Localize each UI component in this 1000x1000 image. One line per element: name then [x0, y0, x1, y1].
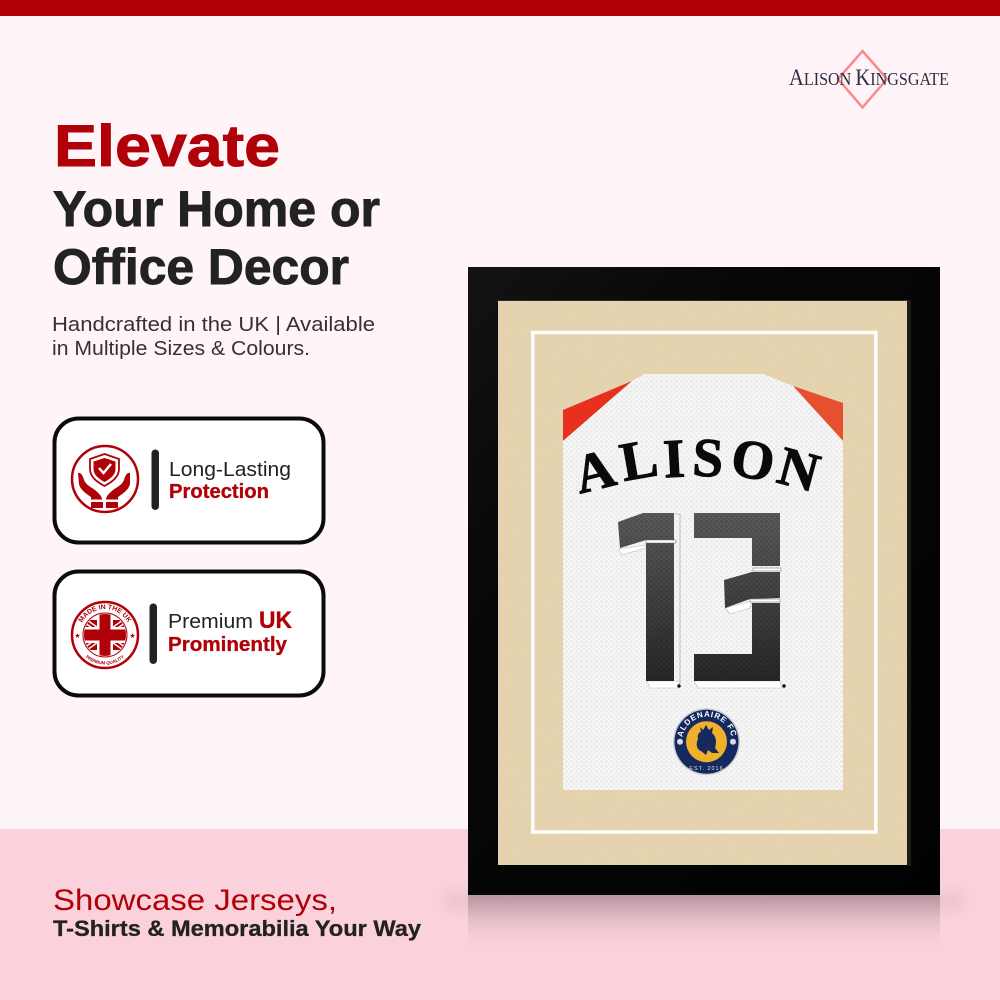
icon: made in the UK stamp: PREMIUM QUALITY	[86, 654, 124, 666]
icon: made in the UK stamp: ★	[74, 632, 81, 640]
mat board	[498, 301, 907, 865]
top bar	[0, 0, 1000, 16]
logo: Alison Kingsgate: ALISON KINGSGATE	[789, 65, 949, 90]
heading: Your Home or	[53, 181, 380, 237]
player name: O	[727, 426, 780, 494]
label: Premium UK Prominently: Premium	[168, 611, 253, 633]
divider	[152, 450, 159, 510]
icon: made in the UK stamp	[70, 600, 140, 670]
player name: N	[772, 435, 826, 504]
player name: A	[568, 437, 621, 505]
panel: long-lasting protection	[54, 418, 324, 542]
label: Premium UK Prominently: UK	[259, 607, 293, 634]
bottom tagline: T-Shirts & Memorabilia Your Way	[53, 916, 422, 941]
label: Long-Lasting Protection: Long-Lasting	[169, 459, 291, 481]
club badge: ALDENAIRE FC	[678, 711, 736, 738]
red sleeve right	[793, 386, 843, 441]
player name: I	[662, 428, 686, 490]
frame	[468, 267, 940, 895]
subheading text: Handcrafted in the UK | Available	[52, 314, 375, 336]
label: Premium UK Prominently: Prominently	[168, 634, 288, 656]
label: Long-Lasting Protection: Protection	[169, 481, 269, 503]
bottom tagline: Showcase Jerseys,	[53, 884, 337, 917]
framed jersey	[468, 267, 940, 895]
divider	[150, 604, 157, 664]
icon: shield in hands	[72, 446, 138, 512]
heading	[53, 114, 380, 295]
icon: made in the UK stamp: MADE IN THE UK	[78, 604, 132, 623]
label: Long-Lasting Protection	[169, 459, 291, 503]
jersey body	[563, 374, 843, 790]
player name: L	[615, 427, 662, 493]
subheading text: in Multiple Sizes & Colours.	[52, 338, 310, 360]
heading: Elevate	[54, 114, 280, 179]
frame reflection	[445, 892, 963, 957]
club badge: EST. 2016	[689, 766, 724, 772]
jersey	[563, 374, 843, 790]
player name	[568, 426, 826, 505]
logo: Alison Kingsgate	[789, 51, 949, 108]
label: Premium UK Prominently	[168, 607, 293, 656]
player name: S	[691, 426, 725, 489]
bottom tagline	[53, 884, 422, 941]
panel: premium UK	[52, 570, 326, 698]
club badge	[673, 708, 740, 776]
red sleeve left	[563, 381, 632, 441]
bottom pink band	[0, 829, 1000, 1000]
subheading text	[52, 314, 375, 360]
white mat line	[533, 332, 876, 832]
icon: made in the UK stamp: ★	[129, 632, 136, 640]
heading: Office Decor	[53, 239, 349, 295]
number 13	[618, 513, 786, 688]
